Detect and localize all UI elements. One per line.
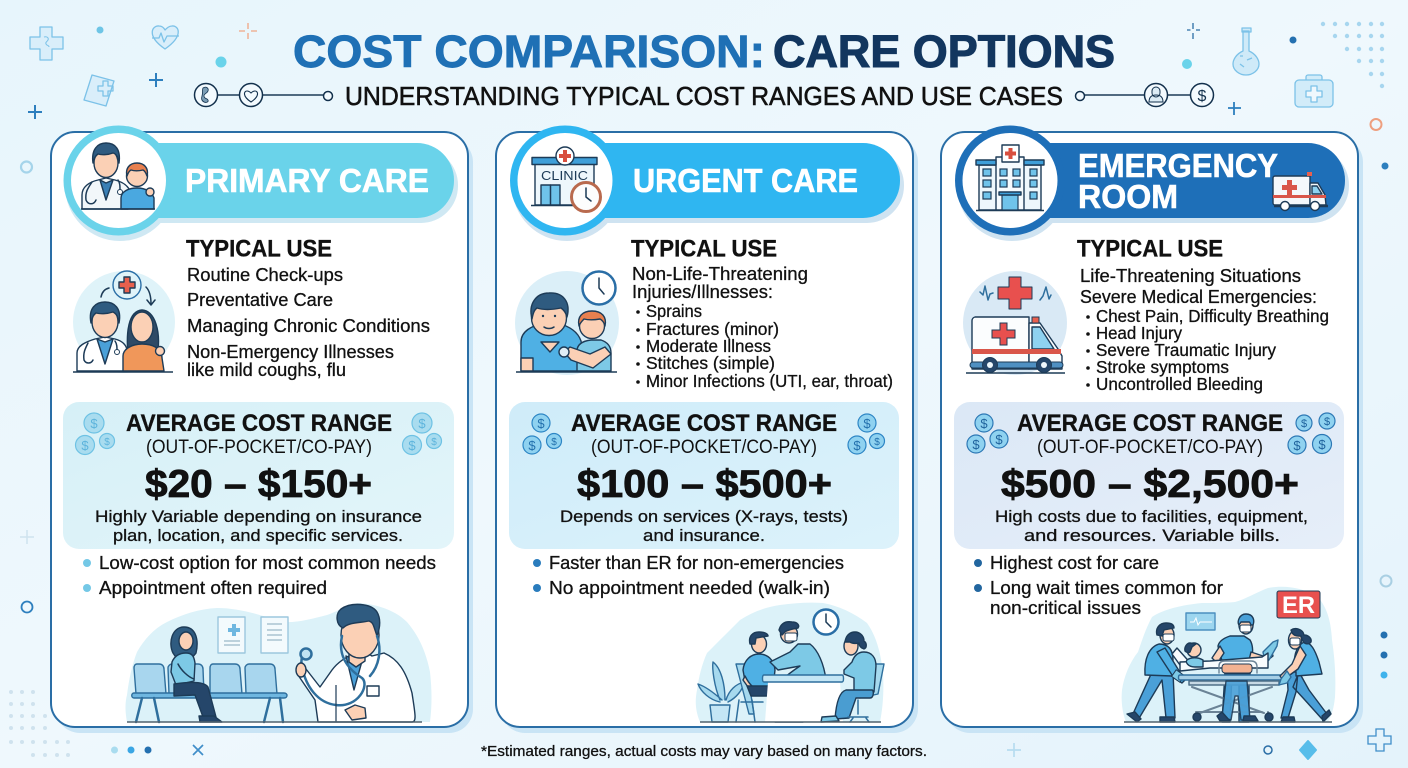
- illustration: waiting room with doctor: [126, 603, 432, 722]
- typical use list: Uncontrolled Bleeding: [1096, 374, 1263, 394]
- title: [293, 26, 1115, 77]
- notes list: [83, 553, 436, 598]
- notes list: [533, 553, 844, 598]
- left subtitle connector icons: [194, 84, 332, 106]
- cost panel: urgent care: [509, 402, 899, 549]
- panel: primary care: [51, 126, 473, 733]
- icon: doctor and child: [81, 143, 155, 209]
- notes list: [974, 553, 1223, 618]
- cost note: High costs due to facilities, equipment,: [995, 507, 1308, 526]
- icon: coins: $: [81, 438, 89, 453]
- cost heading: AVERAGE COST RANGE: [126, 410, 392, 437]
- typical use list: Moderate Illness: [646, 336, 771, 356]
- typical use list: Preventative Care: [187, 290, 333, 310]
- icon: coins: $: [853, 438, 861, 453]
- cost note: [995, 507, 1308, 545]
- title: CARE OPTIONS: [773, 26, 1115, 77]
- typical use list: like mild coughs, flu: [187, 360, 346, 380]
- icon: coins: $: [104, 437, 110, 448]
- right subtitle connector icons: [1076, 84, 1214, 106]
- banner heading: [1078, 147, 1278, 215]
- notes list: Appointment often required: [99, 578, 327, 598]
- cost heading: AVERAGE COST RANGE: [1017, 410, 1283, 437]
- cost panel: primary care: [63, 402, 454, 549]
- illustration: clinic consultation: [696, 603, 884, 722]
- cost subheading: (OUT-OF-POCKET/CO-PAY): [591, 437, 817, 458]
- cost figure: $500 – $2,500+: [1001, 463, 1299, 506]
- cost note: plan, location, and specific services.: [113, 526, 403, 545]
- typical use list: [187, 265, 430, 380]
- notes list: Highest cost for care: [990, 553, 1159, 573]
- typical use list: Severe Medical Emergencies:: [1080, 287, 1317, 307]
- ER sign: ER: [1282, 592, 1315, 619]
- footnote: *Estimated ranges, actual costs may vary based on many factors.: [481, 743, 927, 760]
- typical use list: Life-Threatening Situations: [1080, 266, 1301, 286]
- cost note: and resources. Variable bills.: [1024, 526, 1280, 545]
- header banner: primary care: [64, 126, 458, 241]
- banner heading: EMERGENCY: [1078, 147, 1278, 184]
- typical use list: Chest Pain, Difficulty Breathing: [1096, 306, 1329, 326]
- typical use list: Minor Infections (UTI, ear, throat): [646, 371, 893, 391]
- icon: coins: $: [90, 416, 98, 431]
- illustration: emergency team with stretcher: [1122, 587, 1335, 722]
- icon: ambulance: [1273, 172, 1328, 210]
- icon: man, child and clock: [515, 271, 619, 375]
- cost note: Highly Variable depending on insurance: [95, 507, 422, 526]
- banner heading: URGENT CARE: [633, 162, 858, 199]
- typical use list: Sprains: [646, 301, 702, 321]
- notes list: Low-cost option for most common needs: [99, 553, 436, 573]
- typical use list: Managing Chronic Conditions: [187, 316, 430, 336]
- icon: coins: $: [972, 437, 980, 452]
- subtitle: UNDERSTANDING TYPICAL COST RANGES AND USE CASES: [345, 81, 1063, 111]
- typical use list: [632, 264, 893, 391]
- icon: clinic building with clock: CLINIC: [541, 169, 588, 183]
- typical use list: Head Injury: [1096, 323, 1182, 343]
- typical use list: Non-Emergency Illnesses: [187, 342, 394, 362]
- icon: doctor and patient: [73, 271, 175, 373]
- typical use list: Routine Check-ups: [187, 265, 343, 285]
- icon: coins: $: [874, 437, 880, 448]
- notes list: No appointment needed (walk-in): [549, 578, 830, 598]
- icon: coins: $: [418, 416, 426, 431]
- cost note: and insurance.: [643, 526, 765, 545]
- cost note: Depends on services (X-rays, tests): [560, 507, 848, 526]
- icon: coins: $: [431, 437, 437, 448]
- icon: coins: $: [551, 437, 557, 448]
- right subtitle connector icons: $: [1198, 88, 1207, 105]
- typical use list: Fractures (minor): [646, 319, 779, 339]
- cost subheading: (OUT-OF-POCKET/CO-PAY): [146, 437, 372, 458]
- cost note: [95, 507, 422, 545]
- icon: coins: $: [980, 416, 988, 431]
- typical use list: Severe Traumatic Injury: [1096, 340, 1276, 360]
- icon: coins: [76, 413, 442, 454]
- notes list: non-critical issues: [990, 598, 1141, 618]
- cost heading: AVERAGE COST RANGE: [571, 410, 837, 437]
- panel: emergency room: [941, 126, 1363, 733]
- icon: coins: [967, 413, 1335, 454]
- icon: coins: $: [995, 432, 1003, 447]
- icon: clinic building with clock: [531, 147, 600, 212]
- icon: coins: $: [1301, 418, 1307, 430]
- icon: coins: $: [1318, 437, 1326, 452]
- header banner: emergency room: [955, 126, 1349, 241]
- cost note: [560, 507, 848, 545]
- icon: coins: $: [863, 416, 871, 431]
- heading: typical use: TYPICAL USE: [631, 236, 777, 262]
- icon: coins: $: [537, 416, 545, 431]
- heading: typical use: TYPICAL USE: [186, 236, 332, 262]
- icon: coins: [523, 414, 884, 454]
- banner heading: ROOM: [1078, 178, 1178, 215]
- typical use list: Injuries/Illnesses:: [632, 282, 773, 302]
- banner heading: PRIMARY CARE: [185, 162, 429, 199]
- typical use list: Stroke symptoms: [1096, 357, 1229, 377]
- icon: coins: $: [1293, 438, 1301, 453]
- notes list: Long wait times common for: [990, 578, 1223, 598]
- header banner: urgent care: [510, 126, 904, 241]
- panel: urgent care: [496, 126, 918, 733]
- icon: coins: $: [408, 438, 416, 453]
- cost panel: emergency room: [954, 402, 1344, 549]
- icon: hospital building: [976, 145, 1044, 210]
- typical use list: Stitches (simple): [646, 353, 775, 373]
- typical use list: [1080, 266, 1329, 394]
- cost subheading: (OUT-OF-POCKET/CO-PAY): [1037, 437, 1263, 458]
- cost figure: $100 – $500+: [577, 463, 832, 506]
- icon: coins: $: [528, 438, 536, 453]
- typical use list: Non-Life-Threatening: [632, 264, 808, 284]
- title: COST COMPARISON:: [293, 26, 765, 77]
- heading: typical use: TYPICAL USE: [1077, 236, 1223, 262]
- icon: ambulance with red cross: [963, 271, 1067, 375]
- cost figure: $20 – $150+: [145, 463, 372, 506]
- icon: coins: $: [1324, 416, 1330, 428]
- notes list: Faster than ER for non-emergencies: [549, 553, 844, 573]
